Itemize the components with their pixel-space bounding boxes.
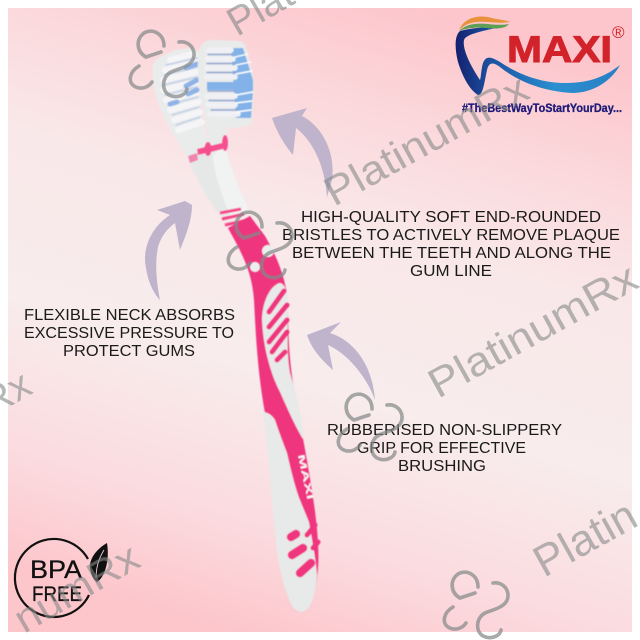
watermark text middle: PlatinumRx [420, 254, 640, 407]
logo tagline: #TheBestWayToStartYourDay... [462, 101, 622, 115]
arrow: neck [145, 201, 192, 300]
text: grip feature: RUBBERISED NON-SLIPPERY [327, 422, 562, 439]
toothbrush handle [228, 216, 318, 612]
text: bristles feature: BETWEEN THE TEETH AND ALONG THE [292, 245, 611, 262]
brand logo: Maxi [456, 16, 625, 115]
watermark logo 2 [228, 212, 292, 278]
text: bristles feature: GUM LINE [410, 263, 492, 280]
pink neck stripes [220, 209, 248, 225]
watermark logo 4 [444, 572, 508, 638]
front toothbrush head [198, 40, 254, 157]
badge: BPA free [15, 539, 108, 617]
badge BPA text: BPA [30, 556, 82, 584]
leaf vein [96, 550, 104, 578]
watermark text bottom left: numRx [7, 535, 147, 640]
side grip marks [307, 525, 318, 548]
text: bristles feature [282, 209, 620, 280]
logo colour stripes [459, 16, 510, 31]
lower grip pad [263, 412, 317, 612]
text: grip feature: GRIP FOR EFFECTIVE [357, 440, 526, 457]
badge ring [15, 539, 89, 617]
front toothbrush neck [212, 135, 250, 216]
logo wordmark: MAXI [507, 29, 612, 70]
badge FREE text: FREE [32, 583, 82, 606]
badge leaf [90, 543, 108, 582]
neck backing [186, 135, 250, 216]
back bristles [163, 54, 202, 130]
front central blue band [207, 82, 253, 90]
neck collars [188, 135, 228, 163]
text: bristles feature: HIGH-QUALITY SOFT END-ROUNDED [301, 209, 601, 226]
back toothbrush head [153, 48, 208, 158]
upper grip stripes [269, 291, 287, 360]
handle holes [262, 245, 274, 257]
arrow: bristles [272, 108, 333, 197]
watermark logo 1 [130, 31, 194, 97]
watermark text upper: PlatinumRx [316, 65, 536, 215]
lower grip marks [291, 534, 311, 573]
arrow: grip [307, 322, 375, 400]
text: flexible neck feature [24, 307, 235, 360]
front white bristles [207, 50, 253, 114]
text: flexible neck feature: EXCESSIVE PRESSURE TO [24, 325, 234, 342]
handle brand text: MAXI [296, 453, 315, 500]
text: grip feature: BRUSHING [398, 458, 486, 475]
text: flexible neck feature: FLEXIBLE NECK ABSORBS [24, 307, 235, 324]
toothbrush illustration [153, 40, 318, 612]
text: flexible neck feature: PROTECT GUMS [63, 343, 195, 360]
front blue bristles [231, 48, 253, 118]
watermark logo 3 [338, 394, 402, 460]
registered mark: ® [612, 23, 625, 42]
text: bristles feature: BRISTLES TO ACTIVELY REMOVE PLAQUE [282, 227, 620, 244]
text: grip feature [327, 422, 562, 475]
logo tooth swoosh [456, 25, 620, 95]
upper grip pad [262, 283, 303, 439]
